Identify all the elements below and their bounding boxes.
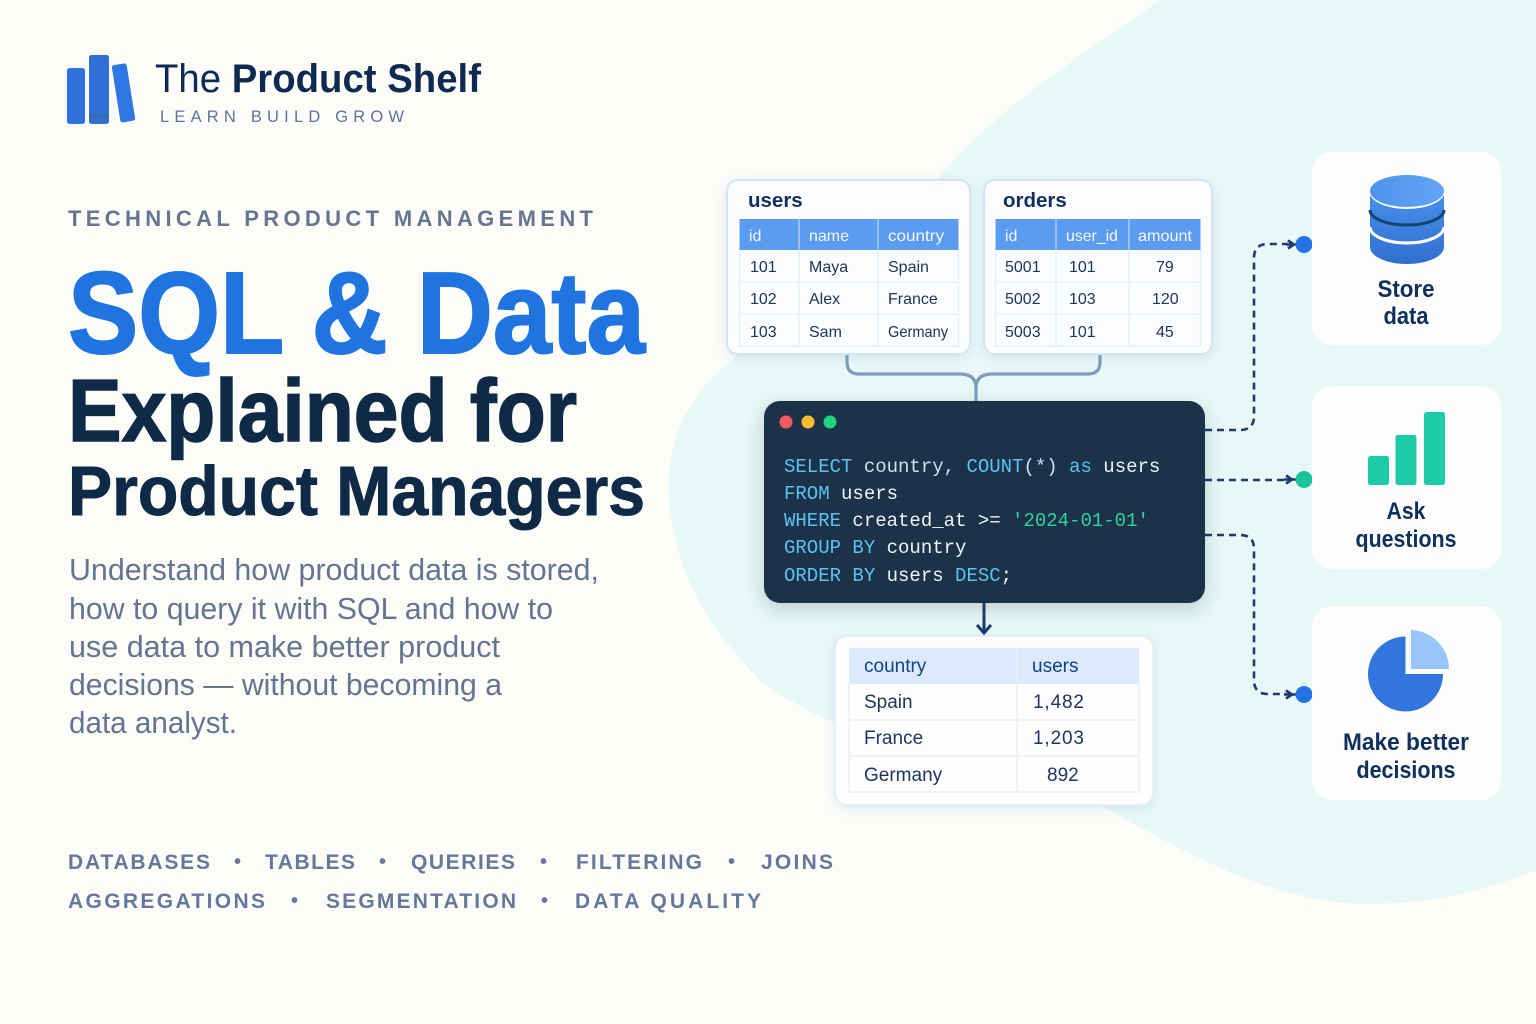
window buttons [780,416,836,428]
table cells: 103 [750,324,777,341]
tagline: LEARN BUILD GROW [160,108,404,126]
label [1378,276,1434,330]
topic tags: • [541,890,548,912]
eyebrow: TECHNICAL PRODUCT MANAGEMENT [68,206,594,231]
icon: database [1369,173,1445,264]
SQL code: SELECT country, COUNT(*) as users [784,456,1160,478]
table cells: 1,203 [1033,728,1084,749]
arrow: code to result [977,603,991,633]
topic tags: QUERIES [411,851,515,874]
icon: books [67,55,135,124]
label [1356,498,1456,553]
topic tags: SEGMENTATION [326,890,516,913]
label: data [1384,303,1429,330]
table cells: 45 [1156,324,1174,341]
panel: store data [1312,152,1501,345]
title: SQL & Data [68,248,646,378]
table cells: France [864,728,923,749]
table cells: id [1005,228,1017,245]
table cells: name [809,228,849,245]
table header [849,648,1139,684]
table cells: Maya [809,259,848,276]
label [1343,729,1469,784]
table cells: user_id [1066,228,1118,245]
description: Understand how product data is stored, [69,552,599,587]
SQL code [784,456,1160,587]
topic tags: JOINS [761,851,833,874]
table cells: 5002 [1005,291,1041,308]
logo [67,55,482,126]
panel: make better decisions [1312,606,1501,800]
SQL code: ORDER BY users DESC; [784,565,1012,587]
table cells: 120 [1152,291,1179,308]
panel: users table [727,180,970,354]
heading: orders: orders [1003,189,1067,212]
table cells [749,228,948,341]
icon: pie chart [1368,630,1449,712]
panel: ask questions [1312,386,1501,569]
topic tags: • [291,890,298,912]
table cells: users [1032,656,1078,677]
table header [996,219,1200,250]
title: Product Managers [68,452,645,530]
table cells: country [888,228,944,245]
description: data analyst. [69,705,237,740]
table cells: Alex [809,291,840,308]
table cells [1005,228,1193,341]
panel: orders table [984,180,1212,354]
panel: result table [835,636,1153,805]
table cells: 1,482 [1033,692,1084,713]
table cells: id [749,228,761,245]
table cells: 102 [750,291,777,308]
table cells: country [864,656,927,677]
label: questions [1356,526,1456,553]
description: how to query it with SQL and how to [69,591,553,626]
description [69,552,599,740]
table cells: amount [1138,228,1193,245]
table cells: 103 [1069,291,1096,308]
label: Make better [1343,729,1469,756]
topic tags: FILTERING [576,851,702,874]
topic tags: DATABASES [68,851,210,874]
label: Ask [1386,498,1426,525]
SQL code: GROUP BY country [784,537,966,559]
label: Store [1378,276,1434,303]
description: use data to make better product [69,629,500,664]
brand name: The Product Shelf [155,57,482,101]
table cells: Spain [864,692,913,713]
title: Explained for [68,361,577,460]
table cells: Germany [888,324,948,341]
topic tags [68,851,833,913]
topic tags: • [540,851,547,873]
heading: users: users [748,189,803,212]
connector: code to store data [1205,236,1312,430]
topic tags: • [728,851,735,873]
topic tags: DATA QUALITY [575,890,761,913]
table cells: Spain [888,259,929,276]
topic tags: TABLES [265,851,355,874]
description: decisions — without becoming a [69,667,503,702]
table cells: 101 [1069,324,1096,341]
table cells [864,656,1084,786]
topic tags: AGGREGATIONS [68,890,265,913]
table header [740,219,958,250]
topic tags: • [234,851,241,873]
table cells: 79 [1156,259,1174,276]
background blob [669,0,1536,904]
label: decisions [1356,757,1456,784]
table cells: 5003 [1005,324,1041,341]
table cells: France [888,291,938,308]
connector: code to ask questions [1205,471,1312,488]
table cells: 101 [1069,259,1096,276]
table cells: Sam [809,324,842,341]
table cells: Germany [864,765,943,786]
SQL code: FROM users [784,483,898,505]
table cells: 5001 [1005,259,1041,276]
connector: code to better decisions [1205,535,1312,703]
topic tags: • [379,851,386,873]
SQL code: WHERE created_at >= '2024-01-01' [784,510,1149,532]
table cells: 101 [750,259,777,276]
table cells: 892 [1047,765,1079,786]
table connector [847,354,1100,402]
icon: bar chart [1368,412,1445,485]
title [68,248,646,530]
panel: SQL code window [764,401,1205,603]
